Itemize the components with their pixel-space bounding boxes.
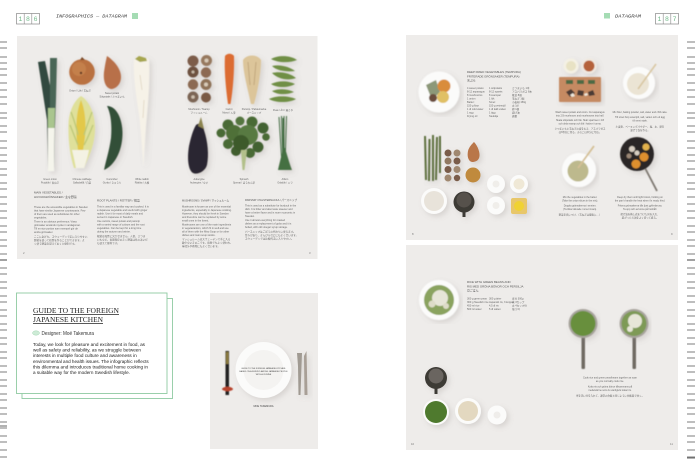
text column: main vegetables: These are the accessible vegetables in Sweden bbox=[34, 205, 89, 209]
icon: bowl of flour bbox=[421, 188, 447, 214]
caption: mix: Doppla grönsakerna i smeten. bbox=[564, 204, 597, 208]
caption: board: Skala sötpotatis och lök. Skär sparrisen i 2/3 bbox=[556, 119, 605, 122]
ingredient table: 5 dl vatten bbox=[489, 307, 501, 311]
ingredient columns: 8 mushrooms bbox=[467, 93, 483, 97]
ingredient columns: 玉ねぎ 1個 bbox=[512, 96, 525, 100]
text column: mushrooms: Mushroom is known as one of the essential bbox=[182, 204, 231, 208]
page numbers: 8 bbox=[412, 232, 414, 236]
heading: JAPANESE KITCHEN bbox=[33, 315, 104, 324]
panel: book cover with plate bbox=[210, 293, 318, 449]
icon: sweet potato bbox=[104, 56, 121, 89]
text column: main vegetables: that have similar Japanese counterparts. Few bbox=[34, 208, 86, 212]
recipe heading: RIS MED GRÖNA BÖNOR OCH PERSILJA bbox=[467, 284, 523, 288]
ingredient columns: 椎茸 8個 bbox=[512, 93, 522, 97]
icon: saucepan with green sauce bbox=[568, 309, 598, 369]
vegetable labels: Gräslök / ニラ bbox=[277, 180, 293, 184]
ingredient table: 青豆 300g bbox=[512, 296, 524, 300]
text column: mushrooms: Mushrooms are one of the main ingredients bbox=[182, 222, 232, 226]
ingredient columns: 1 ägg bbox=[489, 110, 496, 114]
icon: snow peas bbox=[269, 56, 297, 102]
vegetable labels: Spinach bbox=[240, 178, 249, 181]
ingredient columns: 卵 1個 bbox=[512, 107, 520, 111]
vegetable labels: Spenat / ほうれん草 bbox=[233, 180, 256, 184]
text column: parsnip: Sweden. bbox=[245, 214, 255, 218]
cover title on plate: BASED ON A SURVEY AMONG JAPANESE PEOPLE bbox=[239, 370, 288, 373]
text column: main vegetables: grönsaker används mycket i vardagsmat. bbox=[34, 223, 81, 227]
page numbers bbox=[23, 251, 311, 255]
icon: chopsticks bbox=[222, 351, 233, 395]
text column: root vegetables: も使えて便利です。 bbox=[97, 241, 120, 245]
ingredient columns: 150 g flour bbox=[467, 104, 479, 108]
panel: guide description card bbox=[16, 293, 172, 398]
caption: batter: till smet stark. bbox=[633, 120, 648, 122]
page numbers: 10 bbox=[411, 442, 415, 446]
text column: mushrooms: However, they should be fresh in Sweden bbox=[182, 212, 229, 216]
heading bbox=[33, 306, 120, 324]
text column: mushrooms: small ones in the forest. bbox=[182, 218, 209, 222]
icon: white plate bbox=[236, 342, 292, 398]
page number 187 bbox=[656, 14, 678, 24]
ingredient columns: 8-12 asparagus bbox=[467, 90, 485, 94]
ingredient table: 450 ml rice bbox=[467, 304, 480, 308]
page numbers bbox=[411, 442, 673, 446]
text column: main vegetables: 野菜を使って和食を作ることができます。よ bbox=[34, 238, 85, 242]
icon: bowl of pea rice bbox=[419, 280, 459, 320]
text column: main vegetables: MAIN VEGETABLES / bbox=[34, 190, 63, 194]
text column: mushrooms: and therefore can be replaced by some bbox=[182, 215, 227, 219]
caption: mix bbox=[559, 196, 601, 216]
vegetable labels: Green onion bbox=[43, 178, 57, 181]
ingredient columns: 小麦粉 150g bbox=[512, 100, 527, 104]
page header: right bbox=[604, 13, 678, 24]
caption: fry: Ta upp och avrunna på hushåll. bbox=[623, 208, 657, 211]
caption: fry: Deep-fry them until light brown, holding on bbox=[617, 196, 663, 199]
description text: environmental and health issues. The infographic reflects bbox=[33, 359, 149, 365]
cover title on plate bbox=[239, 367, 288, 376]
caption: cook bbox=[576, 376, 644, 398]
vegetable labels bbox=[41, 88, 294, 184]
caption: cook: 米を洗い豆を入れて、通常の炊飯と同じように炊飯器で炊く。 bbox=[576, 394, 644, 398]
ingredient table: 500 ml water bbox=[467, 307, 482, 311]
text column: mushrooms: 味噌汁や煮物にもよく合います。 bbox=[182, 244, 220, 248]
icon: green square bbox=[132, 13, 138, 19]
caption: board: och dela svamp och lök i halvor i tunna. bbox=[559, 122, 602, 126]
text column: parsnip: This is used as a substitute for burdock in the bbox=[245, 204, 297, 208]
text column: main vegetables: There is an obvious preference; Vissa bbox=[34, 220, 77, 224]
ingredient table: Japanskt ris, 3 koppar bbox=[489, 300, 514, 304]
ingredient table: 300 g ärter bbox=[489, 296, 501, 300]
text column: root vegetables: a Japanese vegetable and useful with ginger bbox=[97, 208, 148, 212]
text column: mushrooms: in vegetarianism, which fit in well and use bbox=[182, 226, 229, 230]
caption: board bbox=[555, 111, 606, 134]
caption: cook: medelvärme som du vanligtvis kokar ris. bbox=[588, 389, 632, 392]
icon: plate of tempura bbox=[418, 72, 460, 112]
text column: mushrooms: MUSHROOMS / SVAMP / マッシュルーム bbox=[182, 198, 229, 202]
text column: main vegetables: ここにあげた、スウェーデンで手に入りやすい bbox=[34, 234, 88, 238]
recipe heading: 豆ごはん bbox=[467, 288, 479, 292]
vegetable labels: Carrot bbox=[226, 108, 233, 111]
icon: small white dish bbox=[488, 406, 506, 424]
vegetable labels: Sweet potato bbox=[105, 92, 120, 95]
icon: dark pot bbox=[454, 192, 474, 217]
recipe heading: 天ぷら bbox=[467, 78, 476, 82]
text column: mushrooms: ingredients, especially in Japanese cooking. bbox=[182, 208, 232, 212]
description text: this dilemma and introduces traditional home cooking in bbox=[33, 364, 148, 370]
recipe heading: FRITERADE GRÖNSAKER (TEMPURA) bbox=[467, 74, 520, 78]
front frame bbox=[16, 293, 167, 394]
cover author: MOE TAKEMURA bbox=[253, 405, 274, 408]
page number 187: 7 bbox=[673, 16, 677, 23]
vegetable labels: Mushroom / Svamp bbox=[188, 108, 210, 111]
ingredient columns: 1 sötpotatis bbox=[489, 86, 503, 90]
text column: root vegetables: with a varied range of colours and the root bbox=[97, 222, 145, 226]
vegetable labels: Salladskål / 白菜 bbox=[73, 180, 92, 184]
icon: bowl of peas bbox=[423, 399, 449, 425]
page header: left bbox=[16, 13, 138, 24]
ingredient columns: 1 onion bbox=[467, 96, 476, 100]
ingredient columns: 150 g vetemjöl bbox=[489, 104, 506, 108]
caption: board: Wash sweet potato and onion. Cut asparagus bbox=[555, 111, 605, 114]
page numbers: 9 bbox=[671, 232, 673, 236]
vegetable labels: パースニップ bbox=[247, 110, 262, 114]
ingredient columns: 1 lök bbox=[489, 96, 495, 100]
text column: parsnip: boiled, with old vinegar syrup storage. bbox=[245, 225, 288, 229]
icon: fork and knife bbox=[297, 351, 308, 395]
icon: chives bbox=[278, 116, 292, 170]
ingredient columns: 適量 bbox=[512, 114, 518, 118]
recipe heading: DEEP FRIED VEGETABLES (TEMPURA) bbox=[467, 70, 521, 74]
vegetable labels: Sötpotatis / さつまいも bbox=[99, 94, 125, 98]
panel: recipe spread one bbox=[406, 35, 678, 240]
text column: parsnip: スウェーデンでは比較的手に入りやすい。 bbox=[245, 236, 293, 240]
page number 187: 1 bbox=[657, 16, 661, 23]
text column: root vegetables: ROOT PLANTS / RÖTTER / 根菜 bbox=[97, 198, 140, 202]
icon: cutting board and bowls bbox=[559, 58, 601, 102]
ingredient columns: 1 egg bbox=[467, 110, 474, 114]
caption: board: さつまいもと玉ねぎの皮をむき、アスパラガス bbox=[555, 126, 606, 130]
icon: small white bowls and oil bbox=[487, 175, 528, 214]
ingredient table: 水 4カップ分 bbox=[512, 304, 527, 308]
page number 187: 8 bbox=[665, 16, 669, 23]
text column: mushrooms: dishes and main soup stocks. bbox=[182, 233, 216, 237]
caption: board: into 2/3 mushroom and mushrooms into half. bbox=[556, 114, 604, 118]
caption: cook: Cook rice and green peas/beans together as soon bbox=[583, 376, 638, 380]
text column: main vegetables: Till en stor portion som exempel gör de bbox=[34, 226, 79, 230]
text column: parsnip: パースニップはごぼうの代わりに使えます。 bbox=[245, 230, 296, 234]
description text: well as safety and reliability, as we struggle between bbox=[33, 348, 141, 354]
text column: root vegetables: served in Japanese or Swedish. bbox=[97, 215, 133, 219]
caption: batter: Till smet ihop vetemjöl, salt, vatten och ett ägg bbox=[615, 116, 666, 119]
icon: dark pot small bbox=[425, 367, 447, 394]
text column: parsnip: have a better flavor and is more economic in bbox=[245, 210, 296, 214]
vegetable labels: Gurka / きゅうり bbox=[103, 180, 121, 184]
text column: main vegetables: of them are used as substitutes for other bbox=[34, 212, 80, 216]
icon: onion bbox=[69, 57, 95, 85]
text column: root vegetables: radish. Use it for most of daily meals and bbox=[97, 212, 144, 216]
icon: carrot bbox=[225, 54, 234, 104]
caption: fry: 揚がったら油をよく切って盛る。 bbox=[622, 216, 658, 220]
icon: white radish bbox=[134, 56, 149, 166]
page numbers: 2 bbox=[23, 251, 25, 255]
ingredient columns: 水 1dl bbox=[512, 104, 519, 108]
caption: fry bbox=[615, 196, 665, 220]
text column: main vegetables: HUVUDGRÖNSAKER / 主な野菜 bbox=[34, 194, 77, 199]
text column: parsnip: 甘みがあり、きんぴらなどにもよく合います。 bbox=[245, 233, 298, 237]
vegetable labels: Peas / Ärt / 絹さや bbox=[273, 108, 294, 112]
panel: recipe spread two bbox=[406, 245, 678, 450]
vegetable labels: Onion / Lök / 玉ねぎ bbox=[69, 88, 91, 92]
description text: Today, we look for pleasure and excitement in food, as bbox=[33, 342, 146, 348]
page numbers: 3 bbox=[309, 251, 311, 255]
icon: cucumber bbox=[104, 106, 123, 170]
ingredient columns: アスパラガス 8本 bbox=[512, 90, 532, 94]
cover title on plate: WITH A CUISINE bbox=[256, 373, 272, 376]
icon: leek bbox=[38, 58, 57, 171]
text column: parsnip: dishes as a replacement of gobo and it is bbox=[245, 222, 292, 226]
text column: mushrooms bbox=[182, 198, 233, 248]
vegetable labels: Parsnip / Palsternacka bbox=[242, 108, 267, 111]
text column: mushrooms: 数少ないきのこです。和食でもよく使われ、 bbox=[182, 240, 233, 244]
ingredient columns: Batter: bbox=[467, 100, 475, 104]
caption: mix: (Ta lökar skivade i smet innan). bbox=[563, 208, 597, 211]
icon: bowl with batter and vegetables bbox=[562, 146, 596, 187]
text column: root vegetables: during the autumn and winter. bbox=[97, 230, 131, 234]
icon: frying pan bbox=[620, 137, 657, 191]
icon: sweet potato small bbox=[468, 142, 480, 162]
caption: mix: Mix the vegetables in the batter. bbox=[563, 196, 598, 199]
text column: parsnip: PARSNIP / PALSTERNACKA / パースニップ bbox=[245, 197, 297, 202]
icon: mixing bowl with batter bbox=[623, 64, 656, 99]
icon: mushrooms bbox=[188, 55, 212, 102]
page number 186: 1 bbox=[18, 16, 22, 23]
icon: parsnip bbox=[243, 56, 261, 104]
text column: root vegetables bbox=[97, 198, 150, 245]
page numbers bbox=[412, 232, 673, 236]
vegetable labels: Cucumber bbox=[106, 178, 118, 181]
page number 186 bbox=[16, 14, 40, 24]
vegetable labels: マッシュルーム bbox=[190, 110, 208, 114]
description text bbox=[33, 342, 149, 376]
ingredient columns: 8 svampar bbox=[489, 93, 501, 97]
text column: main vegetables: vegetables. bbox=[34, 216, 47, 220]
icon: leafy greens bbox=[216, 116, 270, 170]
page number 186: 8 bbox=[26, 16, 30, 23]
ingredient columns: さつまいも 1本 bbox=[512, 86, 530, 90]
text column: main vegetables: く使う野菜を覚えておくと便利です。 bbox=[34, 242, 77, 246]
text column: root vegetables: 根菜は和食に欠かせません。人参、さつま bbox=[97, 234, 146, 238]
ingredient columns: Frying oil bbox=[467, 114, 478, 118]
ingredient table: 360 g Swedish rice bbox=[467, 300, 489, 304]
page number 186: 6 bbox=[34, 16, 38, 23]
icon: saucepan with rice bbox=[620, 309, 648, 369]
cover title on plate: GUIDE TO THE FOREIGN JAPANESE KITCHEN: bbox=[241, 367, 286, 370]
caption: cook: as you normally cook rice. bbox=[596, 380, 624, 383]
icon: aubergine bbox=[188, 117, 208, 174]
ingredient columns: 揚げ油 bbox=[512, 110, 520, 114]
description text: interests in multiple food culture and awareness in bbox=[33, 353, 137, 359]
vegetable labels: Purjolök / 長ねぎ bbox=[41, 180, 60, 184]
vegetable labels: Allium bbox=[282, 178, 288, 181]
icon: chinese cabbage bbox=[68, 96, 95, 168]
text column: parsnip: Use it almost everything for roasted bbox=[245, 218, 286, 222]
icon: mushrooms small bbox=[444, 150, 460, 182]
text column: parsnip: dish. It is bitter and also taste sweeter and bbox=[245, 207, 293, 211]
ingredient table: 塩 少々 bbox=[512, 307, 521, 311]
text column: parsnip bbox=[245, 197, 298, 240]
icon: asparagus bbox=[425, 135, 440, 181]
ingredient table bbox=[467, 296, 527, 311]
caption: batter: Mix flour, baking powder, salt, water and chill cake. bbox=[613, 111, 668, 114]
caption: fry: the pan's handle the heat when it's ready fried. bbox=[615, 200, 665, 202]
running head left: INFOGRAPHICS — DATAGRAM bbox=[56, 14, 127, 20]
caption: batter: 小麦粉、ベーキングパウダー、塩、水、卵を bbox=[616, 124, 665, 128]
caption: batter bbox=[613, 111, 668, 132]
vegetable labels: Rättika / 大根 bbox=[135, 180, 150, 184]
caption: cook: Koka ris och gröna bönor tillsammans på bbox=[588, 386, 633, 388]
back frame bbox=[22, 298, 172, 398]
vegetable labels: White radish bbox=[135, 178, 149, 181]
icon: onion small bbox=[466, 168, 480, 182]
ingredient columns: 1 dl kallt vatten bbox=[489, 107, 507, 111]
recipe heading bbox=[467, 70, 521, 82]
description text: a suitable way for the modern Swedish lifestyle. bbox=[33, 370, 130, 376]
caption: board: は3等分に切る。きのこは半分に切る。 bbox=[559, 130, 601, 134]
ingredient table: 300 g green peas bbox=[467, 296, 488, 300]
page numbers: 11 bbox=[670, 442, 673, 446]
caption: batter: 混ぜて衣を作る。 bbox=[630, 128, 650, 132]
ingredient table: 4,5 dl ris bbox=[489, 304, 499, 308]
ingredient columns: 1 dl cold water bbox=[467, 107, 484, 111]
text column: root vegetables: いもなど、長期保存のきく野菜は冬のあいだ bbox=[97, 238, 148, 242]
ingredient columns: 8-12 sparris bbox=[489, 90, 503, 94]
heading: GUIDE TO THE FOREIGN bbox=[33, 306, 120, 315]
text column: mushrooms: all of them with the Miso Soup or for other bbox=[182, 230, 229, 234]
ingredient columns: 4 sweet potato bbox=[467, 86, 484, 90]
text column: root vegetables: This is used in a familiar way and cooked. It is bbox=[97, 204, 150, 208]
icon: bowl of rice bbox=[455, 398, 481, 424]
caption: mix: 野菜を衣につけ、（玉ねぎは最後に…） bbox=[559, 212, 601, 216]
ingredient columns: Stekolja bbox=[489, 114, 499, 118]
vegetable labels: Aubergine / なす bbox=[190, 180, 209, 184]
text column: main vegetables: andra grönsaker. bbox=[34, 230, 53, 234]
vegetable labels: Chinese cabbage bbox=[73, 178, 92, 181]
caption: mix: (Take the onion slices in the mix). bbox=[562, 200, 598, 202]
caption: fry: Fritera grönsakerna tills ljust gyllenbruna. bbox=[618, 204, 663, 208]
text column: mushrooms: マッシュルームはスウェーデンで手に入る bbox=[182, 237, 231, 241]
ingredient columns bbox=[467, 86, 532, 118]
text column: root vegetables: vegetables. Can be kept for a long time bbox=[97, 226, 142, 230]
caption: fry: 揚げ油を熱し衣をつけた具を入れ、 bbox=[620, 212, 660, 216]
ingredient table: 米 3カップ bbox=[512, 300, 525, 304]
panel: main vegetables spread bbox=[17, 36, 318, 259]
running head right: DATAGRAM bbox=[615, 14, 641, 20]
vegetable labels: Morot / 人参 bbox=[222, 110, 236, 114]
vegetable photos, upper row bbox=[38, 54, 297, 174]
recipe heading bbox=[467, 280, 523, 292]
designer credit: Designer: Moë Takemura bbox=[42, 331, 94, 337]
recipe heading: RICE WITH GREEN BEANS AND bbox=[467, 280, 511, 284]
ingredient columns: Smet: bbox=[489, 100, 496, 104]
icon: green square right bbox=[604, 13, 610, 18]
text column: root vegetables: Use carrots, sweet potato and parsnip bbox=[97, 219, 140, 223]
vegetable labels: Aubergine bbox=[193, 178, 205, 181]
text column: main vegetables bbox=[34, 190, 89, 246]
